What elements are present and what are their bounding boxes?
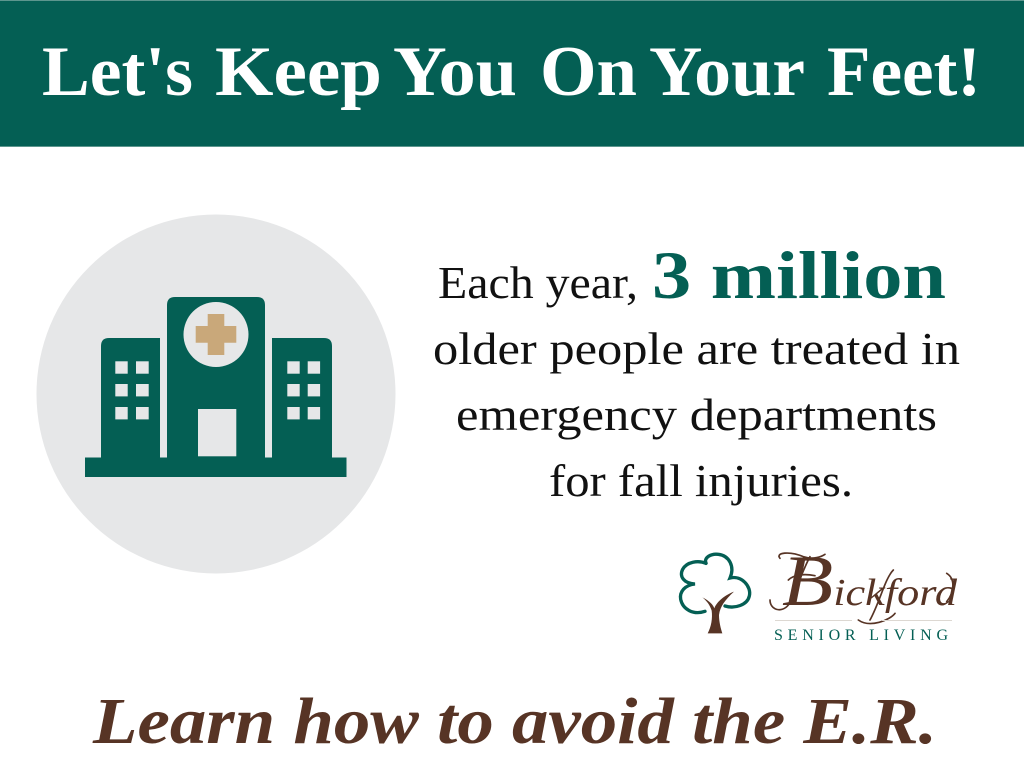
wordmark: Bickford xyxy=(782,541,958,621)
highlighted number: 3 million xyxy=(652,237,946,313)
statistic text block: older people are treated in xyxy=(433,323,960,374)
medical sign xyxy=(184,302,248,367)
logo: Bickford Senior Living xyxy=(680,541,958,644)
icon: tree xyxy=(680,554,750,633)
icon: hospital in grey circle xyxy=(36,214,396,574)
title: Feet! xyxy=(827,33,981,111)
wordmark flourishes xyxy=(770,553,953,623)
hospital building xyxy=(85,297,346,477)
statistic text block: Each year, xyxy=(438,257,638,308)
title: Keep xyxy=(215,33,382,111)
call to action: Learn how to avoid the E.R. xyxy=(92,685,937,758)
statistic text block: for fall injuries. xyxy=(549,455,853,506)
statistic text block: emergency departments xyxy=(456,389,937,440)
title: You xyxy=(393,33,517,111)
tagline: SENIOR LIVING xyxy=(774,627,948,644)
logo divider lines xyxy=(775,620,952,622)
title: On xyxy=(540,33,637,111)
statistic text block xyxy=(433,237,960,506)
windows xyxy=(115,361,320,419)
door xyxy=(198,409,236,456)
header banner xyxy=(0,0,1024,147)
title xyxy=(42,33,981,111)
title: Let's xyxy=(42,33,193,111)
title: Your xyxy=(649,33,805,111)
